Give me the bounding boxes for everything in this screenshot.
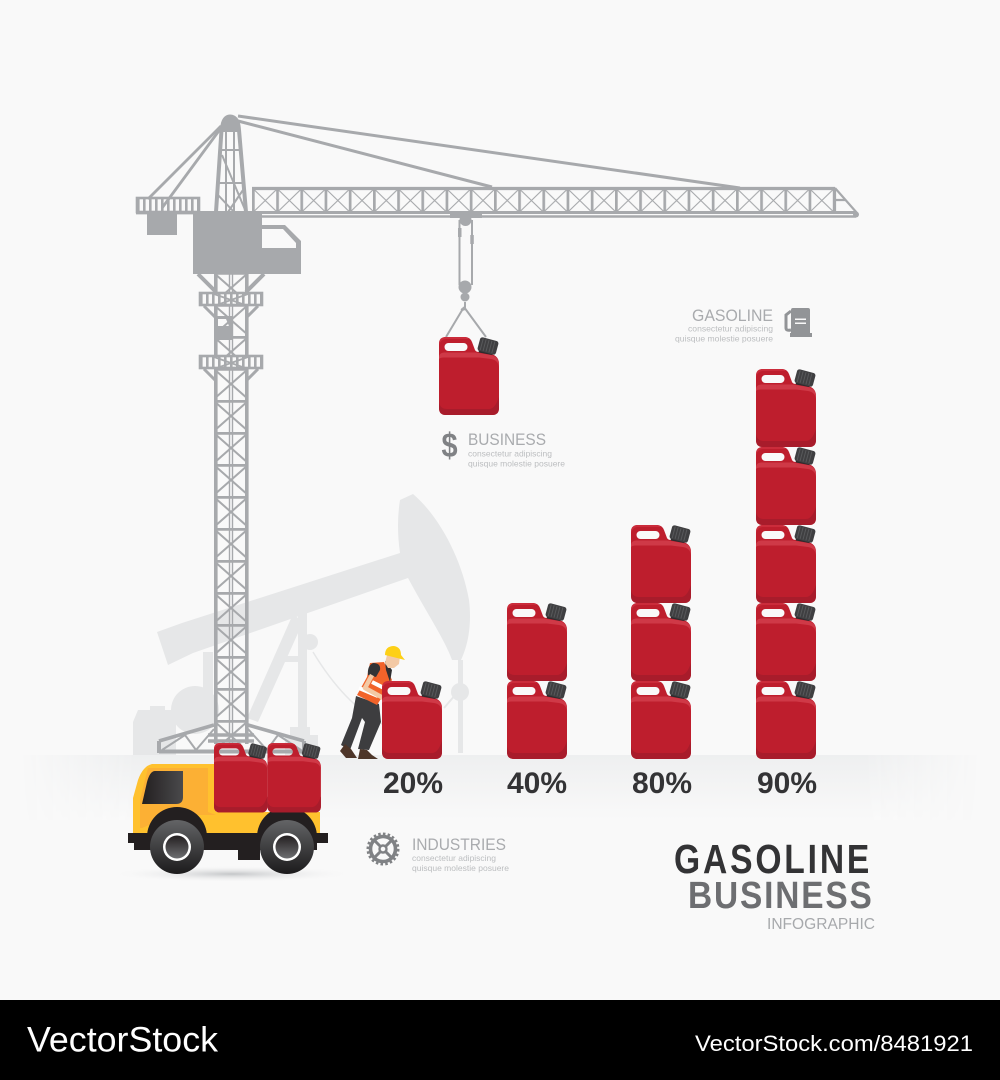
percent labels: 90% bbox=[757, 767, 817, 800]
label: business bbox=[468, 431, 565, 468]
footer brand: VectorStock bbox=[27, 1020, 219, 1060]
tower crane bbox=[136, 114, 859, 753]
percent labels: 80% bbox=[632, 767, 692, 800]
crane base bbox=[159, 725, 304, 753]
bar: 40 percent stack bbox=[507, 603, 567, 759]
label: industries: quisque molestie posuere bbox=[412, 863, 509, 873]
label: industries: INDUSTRIES bbox=[412, 836, 506, 854]
crane boom bbox=[245, 188, 859, 218]
percent labels: 20% bbox=[383, 767, 443, 800]
mast platform lower bbox=[200, 356, 262, 381]
label: gasoline: consectetur adipiscing bbox=[688, 324, 773, 334]
crane ties and stays bbox=[148, 116, 740, 208]
label: gasoline: GASOLINE bbox=[692, 307, 773, 325]
label: business: consectetur adipiscing bbox=[468, 448, 552, 458]
ground bbox=[112, 755, 888, 772]
title bbox=[674, 836, 875, 933]
label: gasoline bbox=[675, 307, 773, 344]
pump jack silhouette bbox=[133, 494, 470, 755]
icon: gas pump bbox=[786, 308, 812, 337]
mast bbox=[198, 274, 264, 744]
title: GASOLINE bbox=[674, 836, 872, 882]
footer image id: VectorStock.com/8481921 bbox=[695, 1031, 973, 1056]
label: gasoline: quisque molestie posuere bbox=[675, 334, 773, 344]
icon: dollar: $ bbox=[441, 426, 458, 465]
mast platform upper bbox=[200, 293, 262, 318]
label: industries: consectetur adipiscing bbox=[412, 853, 496, 863]
title: INFOGRAPHIC bbox=[767, 916, 875, 933]
footer bar bbox=[0, 1000, 1000, 1080]
bar: 20 percent can bbox=[382, 681, 442, 759]
percent labels: 40% bbox=[507, 767, 567, 800]
jerrycan: hanging bbox=[439, 337, 499, 415]
worker bbox=[340, 646, 405, 759]
label: industries bbox=[412, 836, 509, 873]
counter jib bbox=[136, 198, 199, 235]
label: business: BUSINESS bbox=[468, 431, 546, 449]
pulley and hook bbox=[446, 211, 486, 337]
truck shadow bbox=[114, 866, 350, 882]
label: business: quisque molestie posuere bbox=[468, 458, 565, 468]
bar: 80 percent stack bbox=[631, 525, 691, 759]
jerrycans on truck bbox=[214, 743, 321, 812]
mast small cabin bbox=[215, 316, 233, 340]
percent labels bbox=[383, 767, 817, 800]
bar: 90 percent stack bbox=[756, 369, 816, 759]
crane top mast bbox=[216, 114, 246, 212]
truck bbox=[128, 764, 328, 874]
icon: gear bbox=[368, 834, 398, 864]
truck wheel rear bbox=[260, 820, 314, 874]
crane cab bbox=[193, 211, 301, 274]
truck wheel front bbox=[150, 820, 204, 874]
title: BUSINESS bbox=[688, 874, 874, 916]
